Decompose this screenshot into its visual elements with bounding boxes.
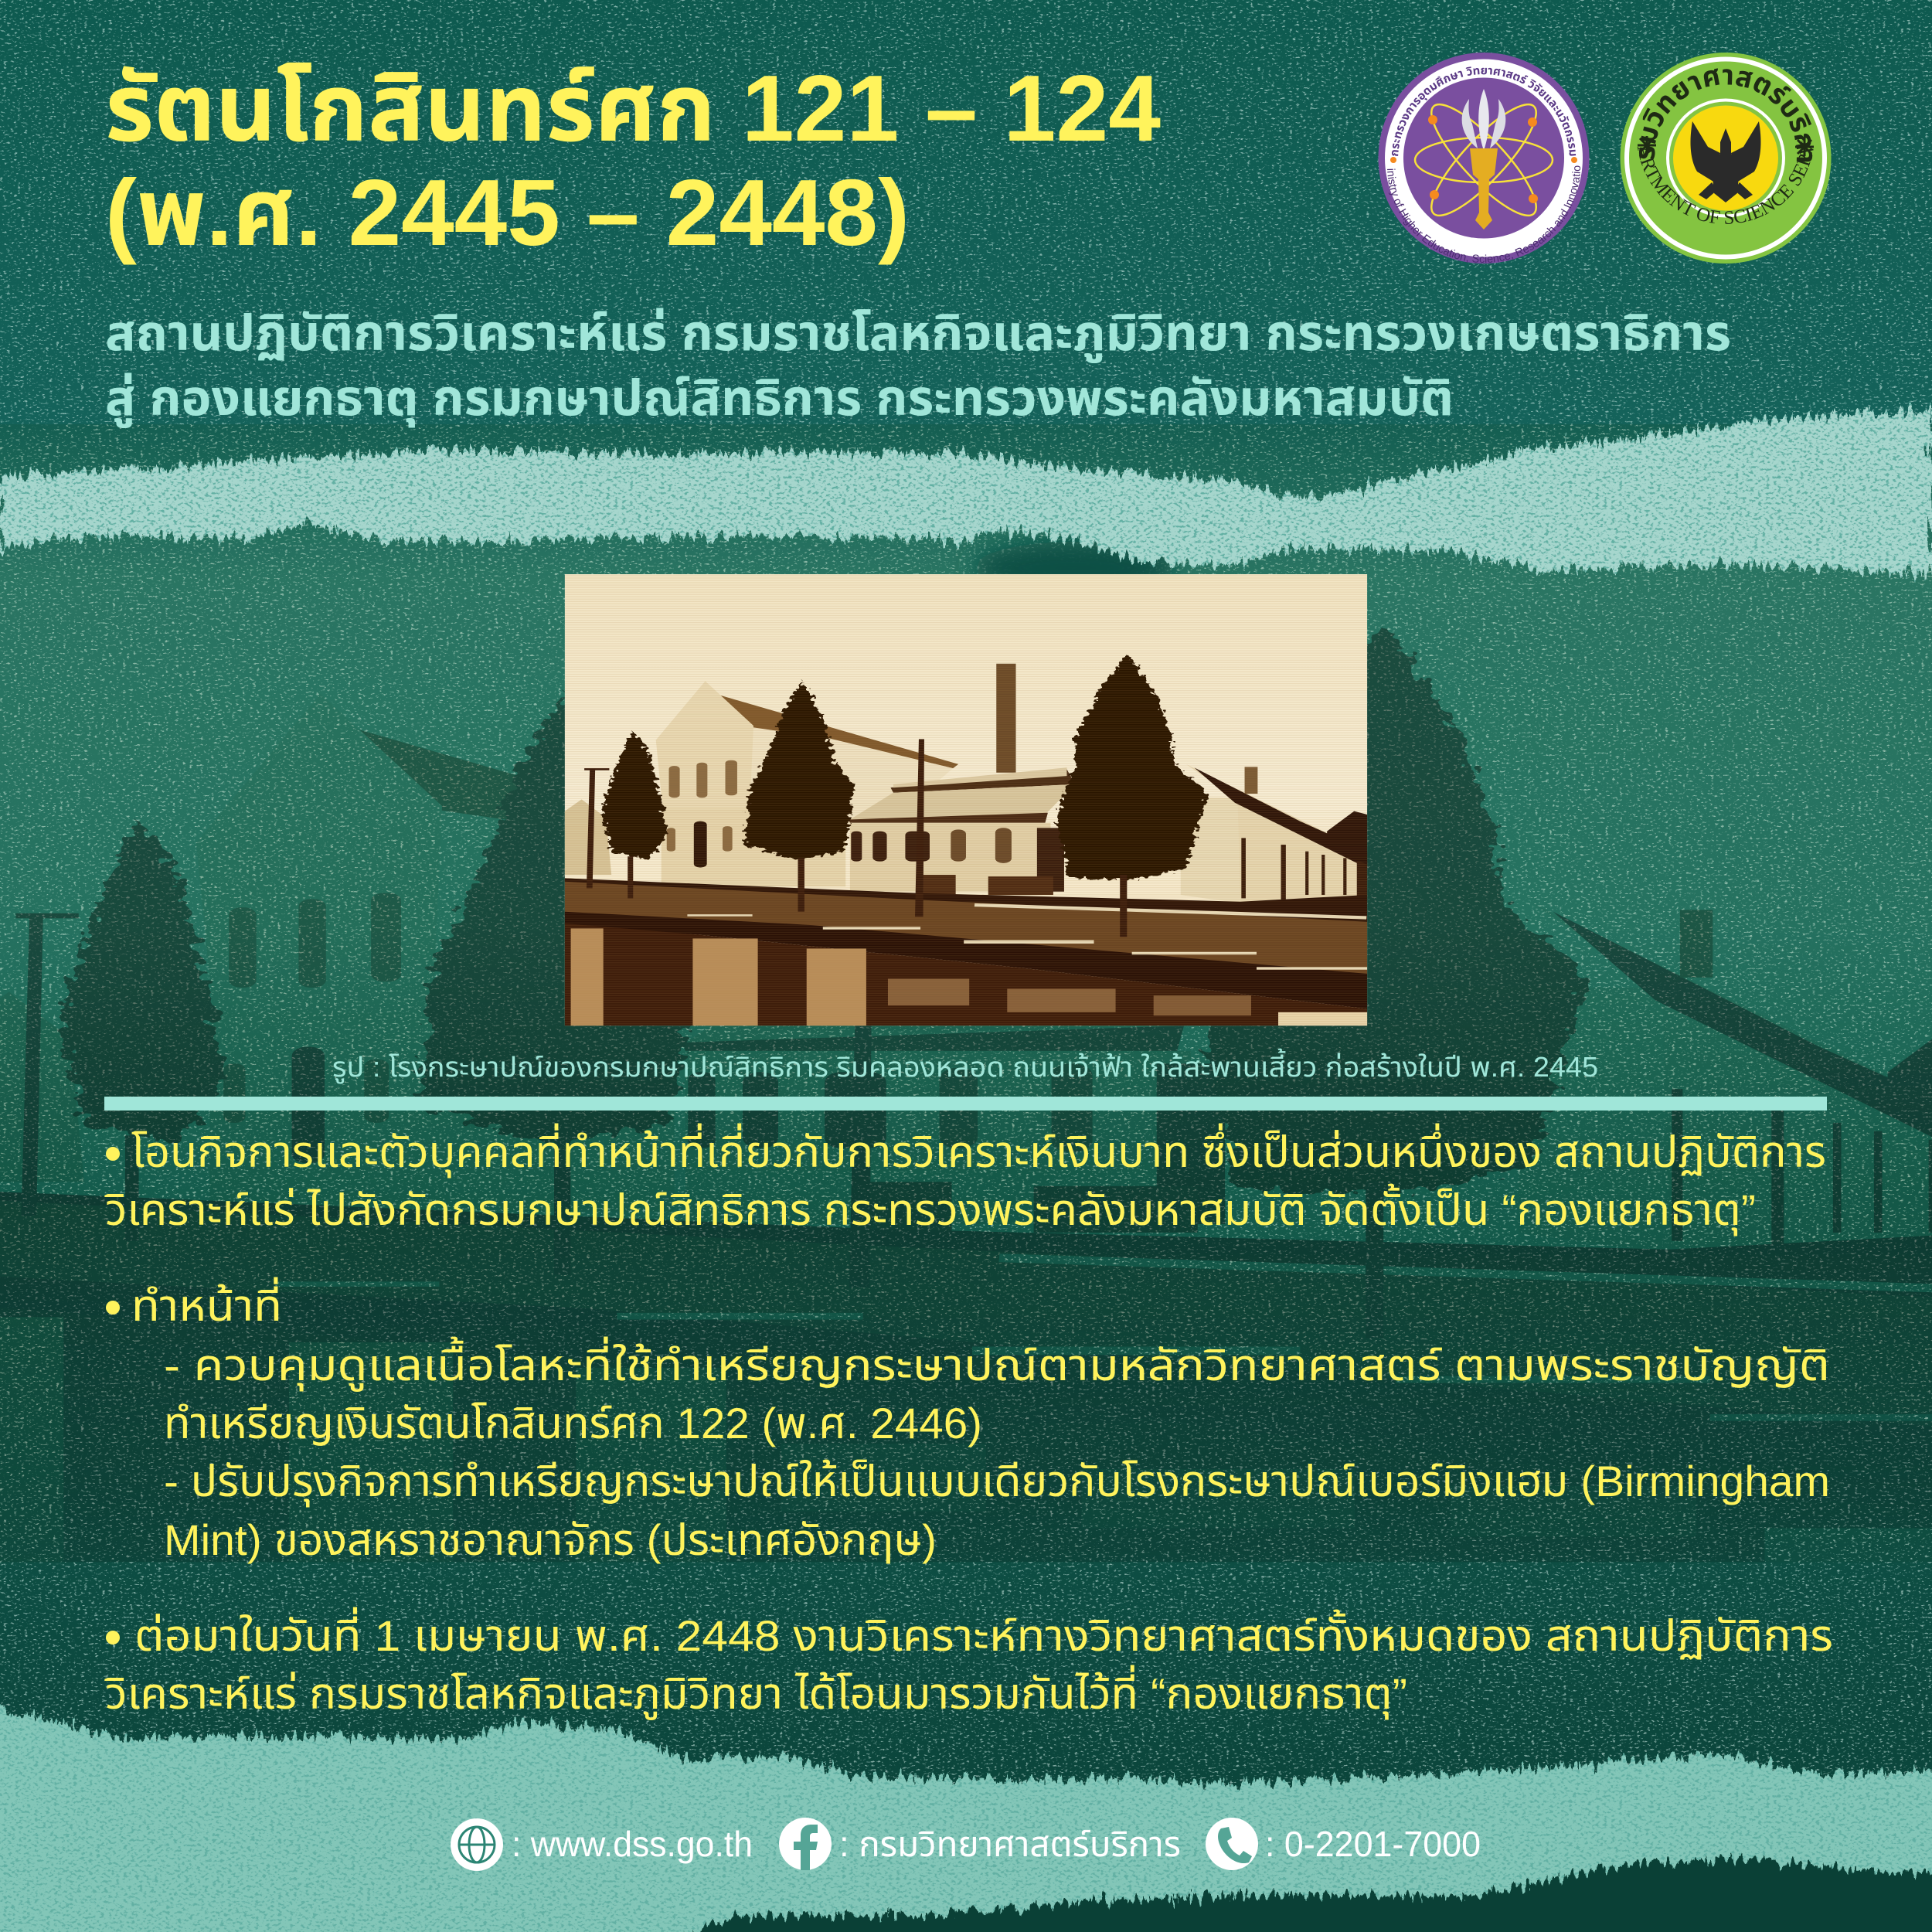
facebook name: : กรมวิทยาศาสตร์บริการ: [839, 1824, 1181, 1864]
bullet 2: ทำเหรียญเงินรัตนโกสินทร์ศก 122 (พ.ศ. 2446): [164, 1399, 982, 1447]
phone number: : 0-2201-7000: [1265, 1824, 1481, 1864]
bullet 3: วิเคราะห์แร่ กรมราชโลหกิจและภูมิวิทยา ได้โอนมารวมกันไว้ที่ “กองแยกธาตุ”: [104, 1665, 1407, 1720]
bullet 1: โอนกิจการและตัวบุคคลที่ทำหน้าที่เกี่ยวกับการวิเคราะห์เงินบาท ซึ่งเป็นส่วนหนึ่งของ สถานปฏิบัติการ: [131, 1123, 1826, 1178]
icon: globe: [451, 1818, 503, 1871]
icon: facebook: [779, 1818, 832, 1870]
logo: ministry: กระทรวงการอุดมศึกษา วิทยาศาสตร์ วิจัยและนวัตกรรม: [1392, 66, 1577, 156]
logo: ministry: [1379, 53, 1589, 264]
bullet 3: [104, 1607, 1833, 1720]
subtitle: สู่ กองแยกธาตุ กรมกษาปณ์สิทธิการ กระทรวงพระคลังมหาสมบัติ: [105, 370, 1454, 428]
website: : www.dss.go.th: [512, 1824, 753, 1864]
icon: phone: [1206, 1818, 1258, 1870]
torn paper strip: bottom: [0, 1706, 1932, 1932]
subtitle: สถานปฏิบัติการวิเคราะห์แร่ กรมราชโลหกิจและภูมิวิทยา กระทรวงเกษตราธิการ: [105, 305, 1731, 363]
bullet 1: วิเคราะห์แร่ ไปสังกัดกรมกษาปณ์สิทธิการ กระทรวงพระคลังมหาสมบัติ จัดตั้งเป็น “กองแยกธาตุ”: [104, 1183, 1756, 1236]
caption: รูป : โรงกระษาปณ์ของกรมกษาปณ์สิทธิการ ริมคลองหลอด ถนนเจ้าฟ้า ใกล้สะพานเสี้ยว ก่อสร้างในปี พ.ศ. 2445: [332, 1048, 1598, 1083]
bullet 2: [106, 1277, 1830, 1564]
divider bar: [104, 1097, 1827, 1111]
body text: [104, 1123, 1833, 1720]
bullet 2: ทำหน้าที่: [131, 1277, 282, 1330]
bullet 2: Mint) ของสหราชอาณาจักร (ประเทศอังกฤษ): [164, 1515, 937, 1564]
bullet 2: - ปรับปรุงกิจการทำเหรียญกระษาปณ์ให้เป็นแบบเดียวกับโรงกระษาปณ์เบอร์มิงแฮม (Birmingham: [164, 1457, 1830, 1507]
ghost photo in background: [0, 424, 1932, 1562]
photo: mint building: [565, 574, 1367, 1026]
torn paper strip: top: [0, 410, 1932, 594]
logo: department of science service: [1620, 53, 1832, 264]
footer contact row: [451, 1818, 1481, 1871]
bullet 2: - ควบคุมดูแลเนื้อโลหะที่ใช้ทำเหรียญกระษาปณ์ตามหลักวิทยาศาสตร์ ตามพระราชบัญญัติ: [164, 1336, 1830, 1392]
subtitle: [105, 305, 1731, 428]
title: รัตนโกสินทร์ศก 121 – 124: [105, 56, 1161, 161]
bullet 1: [104, 1123, 1826, 1236]
bullet 3: ต่อมาในวันที่ 1 เมษายน พ.ศ. 2448 งานวิเคราะห์ทางวิทยาศาสตร์ทั้งหมดของ สถานปฏิบัติการ: [134, 1607, 1833, 1660]
title: (พ.ศ. 2445 – 2448): [105, 160, 910, 265]
title: [105, 56, 1161, 265]
